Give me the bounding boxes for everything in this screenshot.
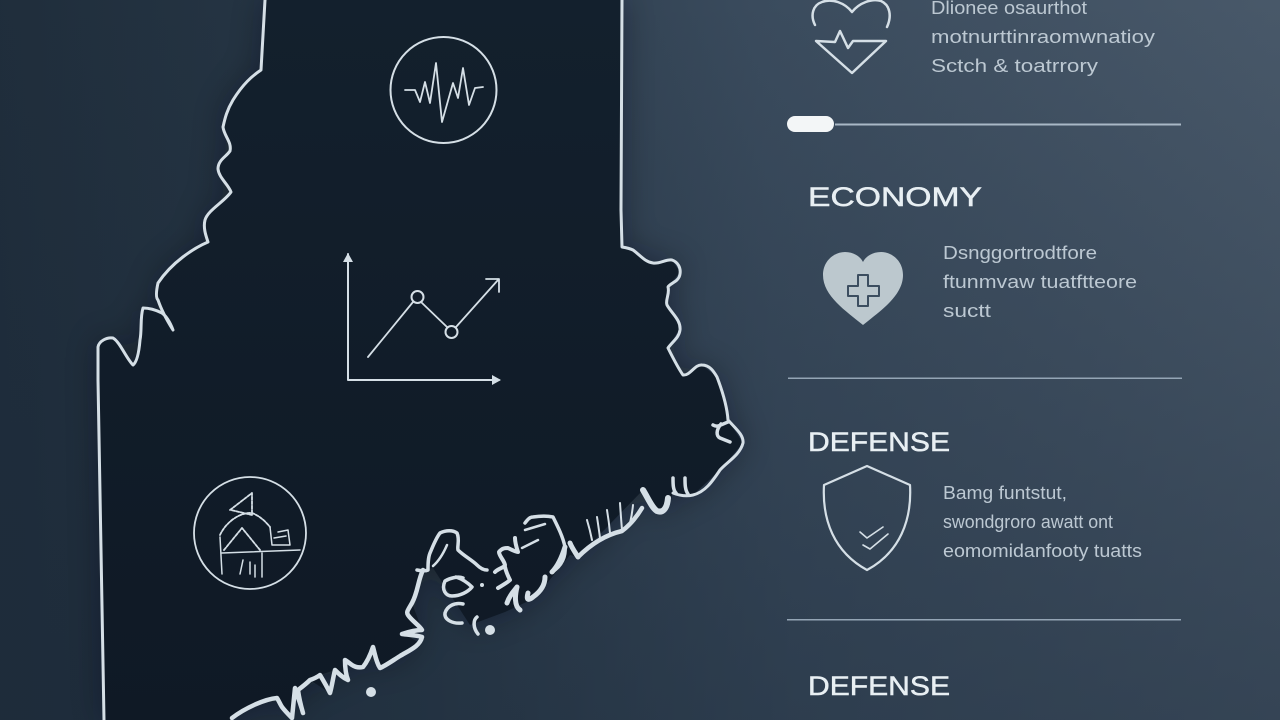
text block: defense description: Bamg funtstut, [943, 482, 1067, 503]
icon: heart with pulse [813, 0, 890, 73]
divider [787, 619, 1181, 620]
text block: defense description: swondgroro awatt ont [943, 511, 1113, 532]
icon: heartbeat waveform in circle [390, 37, 496, 143]
heading: economy: ECONOMY [808, 182, 982, 212]
progress divider with pill [787, 116, 1181, 132]
divider [788, 378, 1182, 379]
text block: economy description: ftunmvaw tuatftteore [943, 271, 1137, 292]
text block: defense description [943, 482, 1142, 561]
heading: defense: DEFENSE [808, 427, 950, 457]
text block: economy description [943, 242, 1137, 321]
panel: top health item [813, 0, 1156, 76]
panel: defense [808, 427, 1142, 570]
icon: building in circle [194, 477, 306, 589]
text block: defense description: eomomidanfooty tuatts [943, 540, 1142, 561]
panel: economy [808, 182, 1137, 325]
text block: top description: motnurttinraomwnatioy [931, 26, 1156, 47]
text block: economy description: Dsnggortrodtfore [943, 242, 1097, 263]
heading: second defense: DEFENSE [808, 671, 950, 701]
icon: line chart with arrow [343, 253, 501, 385]
icon: shield with checks [824, 466, 910, 570]
icon: heart with cross [823, 252, 903, 325]
text block: economy description: suctt [943, 300, 991, 321]
map: southern coast and islands [232, 422, 730, 718]
text block: top description [931, 0, 1156, 76]
text block: top description: Sctch & toatrrory [931, 55, 1099, 76]
map: state outline [98, 0, 743, 720]
